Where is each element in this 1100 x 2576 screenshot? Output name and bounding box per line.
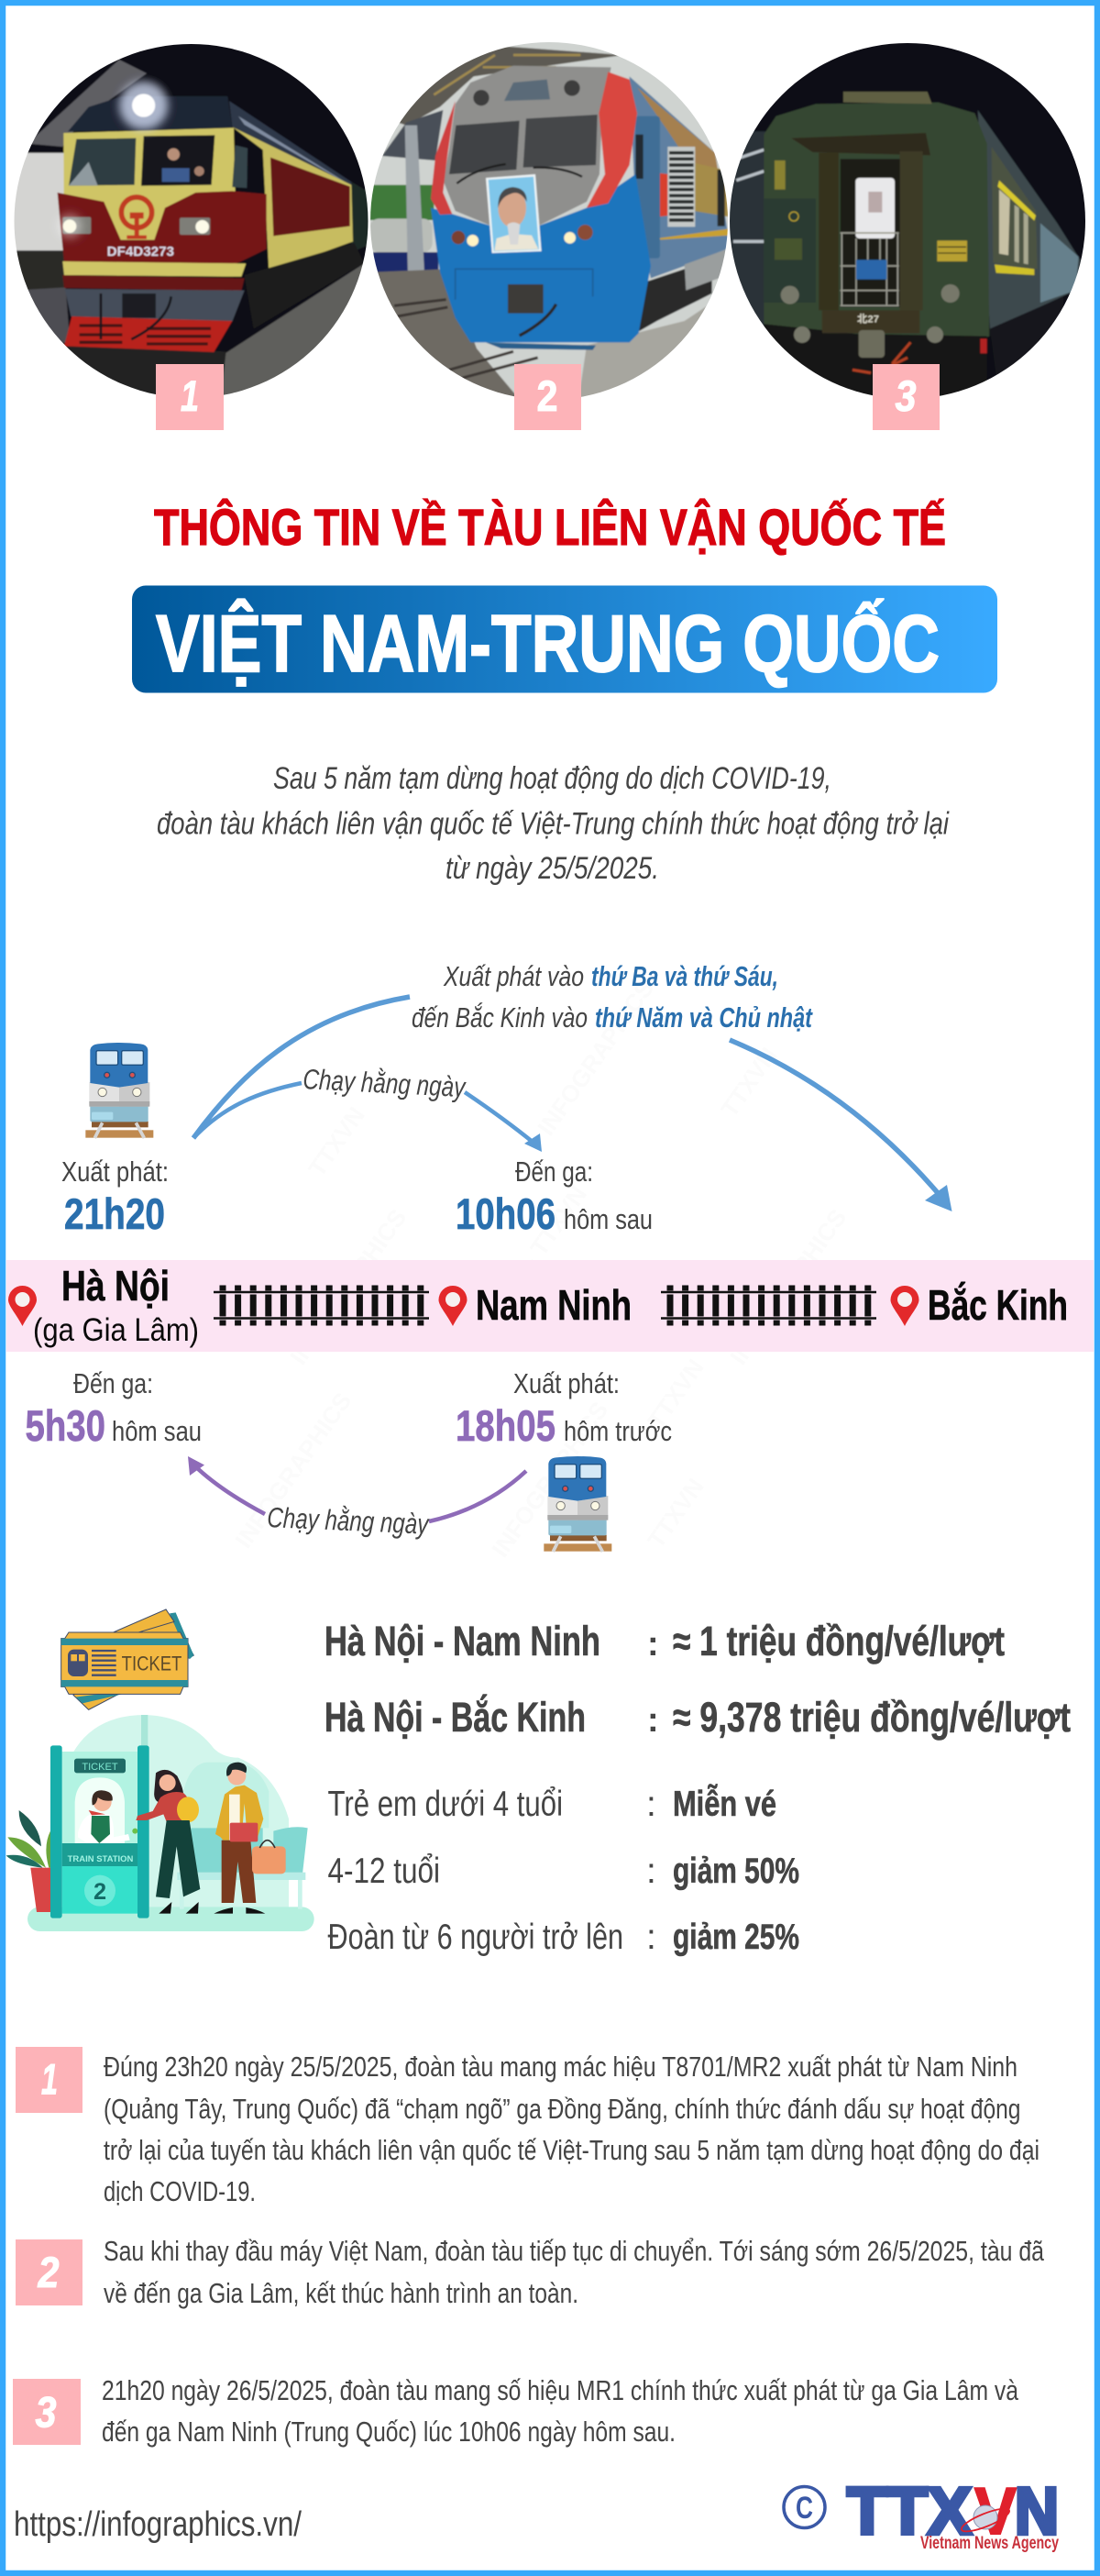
pin: Hanoi <box>8 1286 37 1326</box>
logo: TTXVN: Vietnam News Agency <box>920 2534 1059 2553</box>
fare row: Hanoi - Nanning: : <box>647 1625 659 1664</box>
pin: Nanning <box>438 1286 468 1326</box>
discount row: groups: Đoàn từ 6 người trở lên <box>328 1918 623 1957</box>
number badge 2: 2 <box>537 371 557 420</box>
discount row: under 4 <box>328 1784 776 1824</box>
station: Nanning: Nam Ninh <box>476 1281 632 1329</box>
watermark: TTXVN <box>715 1042 783 1122</box>
arrival Hanoi time: hôm sau <box>112 1415 202 1447</box>
watermark: TTXVN <box>302 1101 370 1181</box>
departure Hanoi time: Xuất phát: <box>61 1155 169 1188</box>
icon: tickets <box>61 1609 193 1709</box>
watermark <box>229 975 852 1562</box>
note 2: về đến ga Gia Lâm, kết thúc hành trình an toàn. <box>104 2277 578 2309</box>
number badge 1 <box>156 364 224 430</box>
watermark: INFOGRAPHICS <box>284 1204 412 1369</box>
arrow: Hanoi to Beijing <box>193 997 952 1211</box>
arrow: Nanning to Hanoi <box>188 1456 526 1521</box>
bench <box>177 1827 308 1909</box>
photo 2: blue locomotive with portrait <box>370 42 728 397</box>
intro text: Sau 5 năm tạm dừng hoạt động do dịch COVID-19, <box>273 761 831 796</box>
label: daily return: Chạy hằng ngày <box>267 1501 431 1541</box>
logo: TTXVN: C <box>796 2491 813 2526</box>
fare row: Hanoi - Beijing <box>324 1694 1071 1741</box>
watermark: TTXVN - TTXVN <box>468 1181 592 1342</box>
fare row: Hanoi - Beijing: : <box>647 1701 659 1740</box>
ticket booth: TRAIN STATION <box>68 1854 133 1863</box>
note 2: 2 <box>38 2248 59 2296</box>
watermark: INFOGRAPHICS <box>532 975 659 1140</box>
arrival Hanoi time <box>26 1367 202 1450</box>
intro text <box>157 761 950 886</box>
discount row: under 4: : <box>646 1785 656 1824</box>
arrow: Hanoi to Nanning <box>193 1083 542 1152</box>
station band <box>6 1260 1094 1352</box>
photo 3: green passenger carriage: 北27 <box>857 314 879 326</box>
man passenger <box>214 1763 286 1914</box>
station: Hanoi: (ga Gia Lâm) <box>33 1312 199 1348</box>
note 3: đến ga Nam Ninh (Trung Quốc) lúc 10h06 ngày hôm sau. <box>102 2416 676 2448</box>
photo 1: red and yellow locomotive: DF4D3273 <box>107 245 174 260</box>
departure Nanning time <box>456 1367 672 1450</box>
ticket booth <box>50 1745 149 1918</box>
number badge 2 <box>514 364 581 430</box>
railway track 2 <box>661 1288 876 1322</box>
plant <box>6 1810 52 1912</box>
arrival Nanning time: 10h06 <box>456 1189 556 1238</box>
callout: Beijing schedule <box>412 960 813 1034</box>
woman passenger <box>136 1770 200 1914</box>
watermark: INFOGRAPHICS <box>724 1204 852 1369</box>
train icon: departing Nanning <box>544 1456 611 1552</box>
discount row: 4-12: : <box>646 1852 656 1891</box>
number badge 3: 3 <box>895 371 917 420</box>
illustration: ticket counter with passengers <box>6 1715 314 1931</box>
title banner: VIỆT NAM-TRUNG QUỐC <box>156 598 940 689</box>
note 1: dịch COVID-19. <box>104 2175 256 2207</box>
note 1 <box>16 2047 1040 2207</box>
callout: Beijing schedule: thứ Ba và thứ Sáu, <box>591 960 778 992</box>
watermark: TTXVN <box>642 1473 710 1553</box>
departure Nanning time: hôm trước <box>564 1415 672 1447</box>
arrival Hanoi time: 5h30 <box>26 1401 105 1450</box>
departure Nanning time: Xuất phát: <box>513 1367 620 1399</box>
callout: Beijing schedule: thứ Năm và Chủ nhật <box>595 1001 813 1034</box>
railway track 1 <box>214 1288 429 1322</box>
number badge 3 <box>873 364 940 430</box>
photo 1: red and yellow locomotive <box>15 44 368 395</box>
note 1: 1 <box>41 2054 58 2104</box>
note 2 <box>16 2235 1045 2309</box>
arrival Nanning time: Đến ga: <box>515 1155 593 1188</box>
discount row: groups: giảm 25% <box>673 1918 799 1957</box>
departure Hanoi time <box>61 1155 169 1238</box>
intro text: từ ngày 25/5/2025. <box>446 851 659 886</box>
photo 3: green passenger carriage <box>730 43 1085 396</box>
logo: TTXVN: TTX <box>847 2475 972 2548</box>
logo: TTXVN: N <box>1015 2475 1059 2548</box>
arrival Hanoi time: Đến ga: <box>73 1367 153 1399</box>
label: daily outbound: Chạy hằng ngày <box>302 1063 468 1103</box>
train icon: departing Hanoi <box>85 1043 153 1138</box>
fare table <box>324 1618 1071 1957</box>
route diagram <box>6 960 1094 1552</box>
fare row: Hanoi - Nanning <box>324 1618 1005 1664</box>
watermark: INFOGRAPHICS <box>229 1388 357 1553</box>
arrival Nanning time <box>456 1155 653 1238</box>
pin: Beijing <box>891 1286 918 1326</box>
watermark: TTXVN <box>642 1354 710 1433</box>
discount row: under 4: Trẻ em dưới 4 tuổi <box>328 1785 563 1824</box>
discount row: 4-12: giảm 50% <box>673 1852 799 1891</box>
fare row: Hanoi - Nanning: ≈ 1 triệu đồng/vé/lượt <box>673 1618 1005 1664</box>
departure Hanoi time: 21h20 <box>64 1189 165 1238</box>
callout: Beijing schedule: đến Bắc Kinh vào <box>412 1001 588 1034</box>
discount row: 4-12 <box>328 1852 799 1891</box>
fare row: Hanoi - Nanning: Hà Nội - Nam Ninh <box>324 1618 600 1664</box>
ticket booth: 2 <box>94 1879 106 1905</box>
discount row: 4-12: 4-12 tuổi <box>328 1852 440 1891</box>
station: Hanoi: Hà Nội <box>61 1262 170 1310</box>
arrival Nanning time: hôm sau <box>564 1203 653 1235</box>
discount row: under 4: Miễn vé <box>673 1784 776 1824</box>
watermark: INFOGRAPHICS <box>486 1397 613 1562</box>
logo: TTXVN: V <box>974 2475 1017 2548</box>
source url: https://infographics.vn/ <box>14 2505 302 2544</box>
number badge 1: 1 <box>181 371 199 420</box>
note 3: 3 <box>35 2388 57 2436</box>
station: Hanoi <box>33 1262 199 1348</box>
icon: tickets: TICKET <box>122 1652 182 1675</box>
ticket booth: TICKET <box>82 1762 118 1773</box>
callout: Beijing schedule: Xuất phát vào <box>443 960 584 992</box>
fare row: Hanoi - Beijing: Hà Nội - Bắc Kinh <box>324 1694 586 1741</box>
departure Nanning time: 18h05 <box>456 1401 556 1450</box>
discount row: groups: : <box>646 1918 656 1957</box>
note 3 <box>13 2374 1019 2448</box>
logo: TTXVN <box>784 2475 1059 2553</box>
